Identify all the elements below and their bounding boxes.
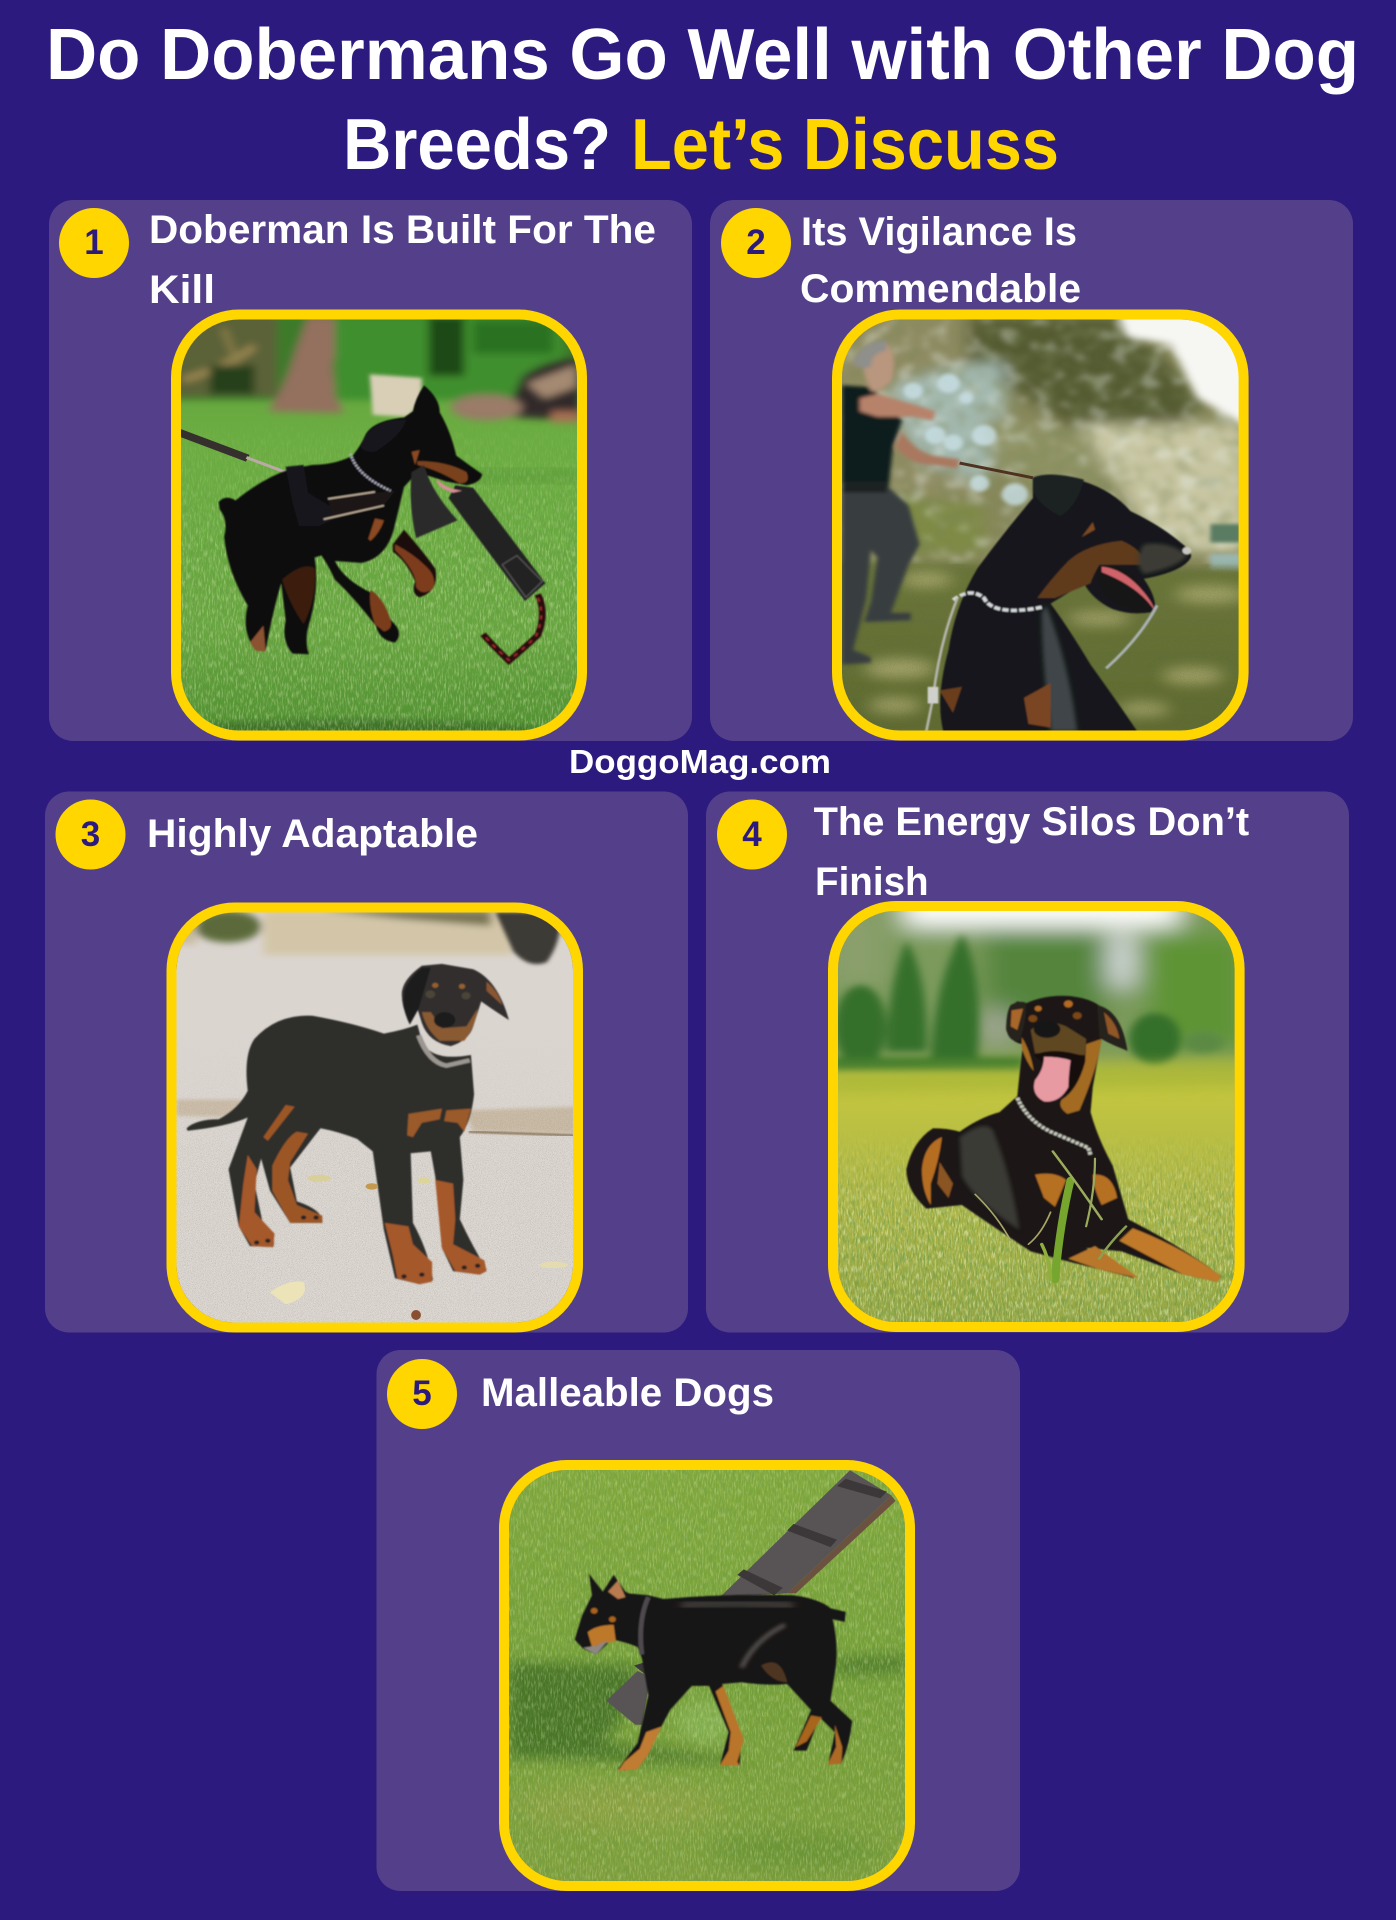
photo 3: doberman puppy on gravel [165,909,585,1326]
badge 4 [717,800,787,870]
tan [1037,541,1144,598]
bite rag [411,465,458,538]
badge 2 [721,208,791,278]
heading 2: Commendable [800,267,1081,311]
mouth [1126,574,1152,613]
stick [835,1187,897,1211]
photo 2: man with leash behind seated doberman [833,313,1250,739]
side sheen [960,1126,1020,1230]
ground [833,561,1250,735]
ear [361,420,406,452]
frame 2 [837,314,1244,736]
panel: 4 The Energy Silos Don't Finish [706,792,1349,1332]
heading 2: Its Vigilance Is [801,210,1077,254]
badge 4: 4 [742,815,762,854]
heading 4 [814,800,1249,904]
heading 2 [800,210,1081,311]
handle strap [483,594,542,661]
heading 4: The Energy Silos Don’t [814,800,1249,844]
panel: 2 Its Vigilance Is Commendable [710,200,1353,741]
tan legs [385,1223,432,1284]
title [46,15,1359,185]
heading 3: Highly Adaptable [147,812,478,856]
panel: 5 Malleable Dogs [376,1350,1020,1891]
frame 4 [833,906,1240,1327]
heading 1 [149,208,656,312]
title: Let’s Discuss [631,105,1059,185]
badge 5 [387,1359,457,1429]
harness [286,465,344,526]
chain [1017,1098,1091,1155]
eyes and nose [1028,1015,1037,1022]
frame 1 [176,314,582,736]
ramp [720,1470,891,1597]
chest highlight [1042,605,1077,731]
badge 5: 5 [412,1374,432,1413]
heading 1: Doberman Is Built For The [149,208,656,252]
head [402,964,509,1046]
badge 3: 3 [81,815,100,854]
photo 4: doberman lying in sunny grass [838,911,1235,1322]
dog [187,964,509,1284]
heading 4: Finish [815,860,929,904]
grass blades [975,1151,1126,1280]
ear [1033,475,1084,516]
tan chest [407,1109,442,1137]
dog [219,385,546,661]
photo 1: doberman tugging a bite rag on grass [170,313,589,742]
badge 1 [59,208,129,278]
far foreleg [393,530,436,597]
collar [350,454,391,491]
website label: DoggoMag.com [569,743,831,780]
collar [419,1035,470,1066]
photo 5: doberman walking past agility ramp [499,1466,915,1888]
tan markings [370,590,391,631]
dog [926,475,1191,731]
badge 1: 1 [84,223,104,262]
mouth and tongue [1034,1051,1085,1096]
heading 1: Kill [149,268,215,312]
frame 3 [172,908,578,1328]
badge 2: 2 [746,223,766,262]
title: Do Dobermans Go Well with Other Dog [46,15,1359,95]
lead [926,598,957,731]
panel: 3 Highly Adaptable [45,792,688,1332]
frame 5 [504,1465,910,1886]
leash [960,463,1033,478]
tan [922,1137,942,1205]
dog [575,1574,852,1771]
badge 3 [56,800,126,870]
title: Breeds? [343,105,611,185]
chain collar [953,593,1042,610]
leaves [270,1282,305,1304]
panel: 1 Doberman Is Built For The Kill [49,200,692,742]
leash [179,432,248,458]
ears [1006,1002,1026,1041]
cheeks and muzzle [1022,1037,1034,1071]
heading 5: Malleable Dogs [481,1371,774,1415]
tan legs [618,1727,661,1771]
dog [906,996,1221,1282]
man [842,340,960,665]
